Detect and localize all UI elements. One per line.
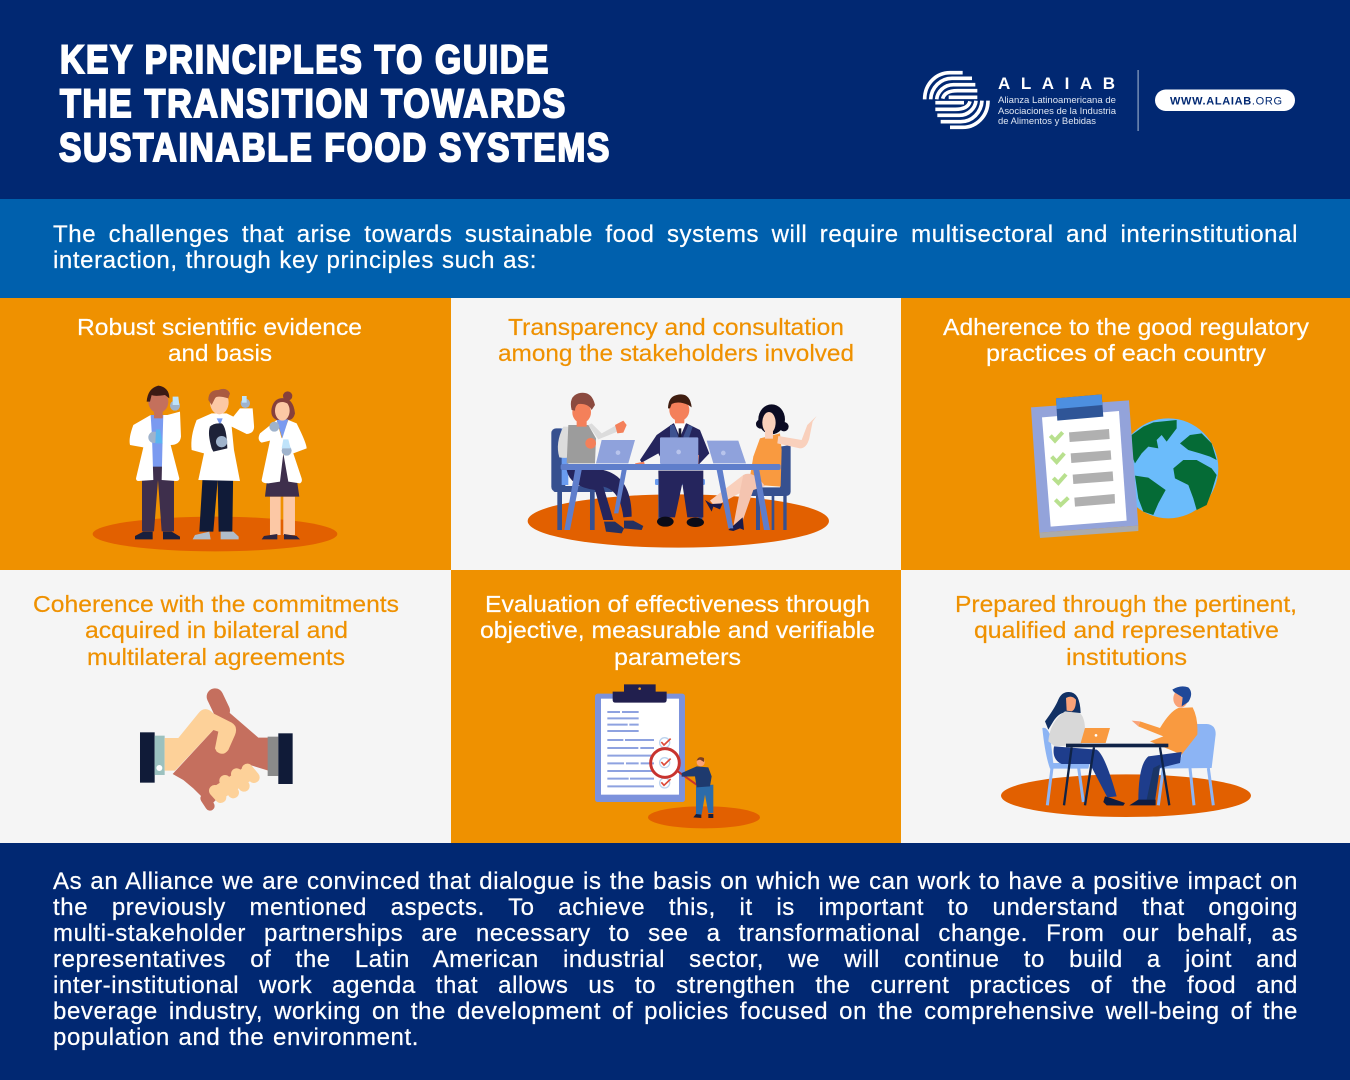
clipboard <box>1039 526 1138 538</box>
intro text: The challenges that arise towards sustainable food systems will require multisectoral and interinstitutional <box>53 221 1298 248</box>
man two <box>655 479 705 485</box>
heading: Prepared through institutions: qualified and representative <box>974 617 1279 643</box>
panel: evaluation background <box>451 570 901 843</box>
illustration: checklist and globe <box>1031 394 1218 538</box>
illustration: two people talking <box>1001 686 1251 817</box>
inspector <box>696 785 713 815</box>
intro text: interaction, through key principles such as: <box>53 247 537 274</box>
closing text: the previously mentioned aspects. To achieve this, it is important to understand that ongoing <box>53 894 1298 921</box>
illustration: handshake <box>140 697 293 806</box>
heading: Prepared through institutions: Prepared through the pertinent, <box>955 591 1297 617</box>
heading: Adherence to good regulatory practices: Adherence to the good regulatory <box>943 314 1309 340</box>
closing text: beverage industry, working on the development of policies focused on the comprehensive well-being of the <box>53 998 1298 1025</box>
man <box>1138 707 1197 755</box>
website pill: WWW.ALAIAB.ORG <box>1170 96 1282 108</box>
left chair <box>557 490 595 530</box>
logo subtitle: de Alimentos y Bebidas <box>998 116 1096 126</box>
heading: Coherence with commitments: acquired in bilateral and <box>85 617 348 643</box>
illustration: inspector and clipboard <box>595 684 760 828</box>
heading: Adherence to good regulatory practices <box>943 314 1309 366</box>
title: THE TRANSITION TOWARDS <box>60 82 567 126</box>
table <box>561 464 781 470</box>
heading: Transparency and consultation: among the stakeholders involved <box>498 340 854 366</box>
title: SUSTAINABLE FOOD SYSTEMS <box>59 126 611 170</box>
title <box>59 38 611 170</box>
laptops <box>596 440 635 463</box>
magnifying glass <box>651 749 679 777</box>
heading: Coherence with commitments: multilateral agreements <box>87 644 345 670</box>
table <box>1066 744 1168 747</box>
heading: Coherence with commitments <box>33 591 399 670</box>
scientist two <box>199 465 233 532</box>
heading: Coherence with commitments: Coherence with the commitments <box>33 591 399 617</box>
heading: Evaluation of effectiveness: parameters <box>614 644 741 670</box>
heading: Evaluation of effectiveness: Evaluation of effectiveness through <box>485 591 870 617</box>
laptop <box>1081 728 1110 743</box>
closing text <box>52 868 1298 1051</box>
check marks <box>660 738 670 788</box>
closing text: inter-institutional work agenda that allows us to strengthen the current practices of the food and <box>53 972 1298 999</box>
document lines <box>607 712 654 786</box>
heading: Prepared through institutions <box>955 591 1297 670</box>
heading: Prepared through institutions: institutions <box>1066 644 1187 670</box>
closing text: As an Alliance we are convinced that dialogue is the basis on which we can work to have a positive impact on <box>53 868 1298 895</box>
heading: Adherence to good regulatory practices: practices of each country <box>986 340 1266 366</box>
man one <box>558 427 588 458</box>
heading: Transparency and consultation: Transparency and consultation <box>508 314 844 340</box>
illustration: three scientists <box>93 386 337 551</box>
heading: Robust scientific evidence <box>77 314 362 366</box>
closing text: multi-stakeholder partnerships are necessary to see a transformational change. From our behalf, as <box>53 920 1298 947</box>
logo: ALAIAB <box>925 70 1295 131</box>
logo subtitle: Asociaciones de la Industria <box>998 106 1117 116</box>
logo subtitle: Alianza Latinoamericana de <box>998 95 1116 105</box>
panel: scientific evidence background <box>0 298 451 570</box>
heading: Robust scientific evidence: Robust scientific evidence <box>77 314 362 340</box>
logo subtitle <box>998 95 1117 126</box>
intro band <box>0 199 1350 298</box>
scientist three <box>270 497 295 535</box>
logo wordmark: ALAIAB <box>998 74 1115 93</box>
panel: regulatory practices background <box>901 298 1350 570</box>
right chair <box>756 493 787 530</box>
header band <box>0 0 1350 199</box>
panel: institutions background <box>901 570 1350 843</box>
woman <box>1045 692 1081 730</box>
panel: coherence background <box>0 570 451 843</box>
closing text: population and the environment. <box>53 1024 419 1051</box>
illustration: meeting at table <box>528 393 829 548</box>
panel: transparency background <box>451 298 901 570</box>
logo mark <box>925 73 988 127</box>
heading: Evaluation of effectiveness <box>480 591 875 670</box>
continents <box>1132 420 1177 463</box>
checklist rows <box>1069 429 1115 507</box>
left chair <box>1042 728 1090 769</box>
scientist one <box>142 465 174 531</box>
heading: Evaluation of effectiveness: objective, measurable and verifiable <box>480 617 875 643</box>
title: KEY PRINCIPLES TO GUIDE <box>60 38 550 82</box>
heading: Robust scientific evidence: and basis <box>168 340 272 366</box>
website pill <box>1155 90 1295 111</box>
intro text <box>53 221 1298 274</box>
woman <box>750 433 782 487</box>
right chair <box>1158 724 1216 769</box>
heading: Transparency and consultation <box>498 314 854 366</box>
closing text: representatives of the Latin American industrial sector, we will continue to build a joint and <box>53 946 1298 973</box>
